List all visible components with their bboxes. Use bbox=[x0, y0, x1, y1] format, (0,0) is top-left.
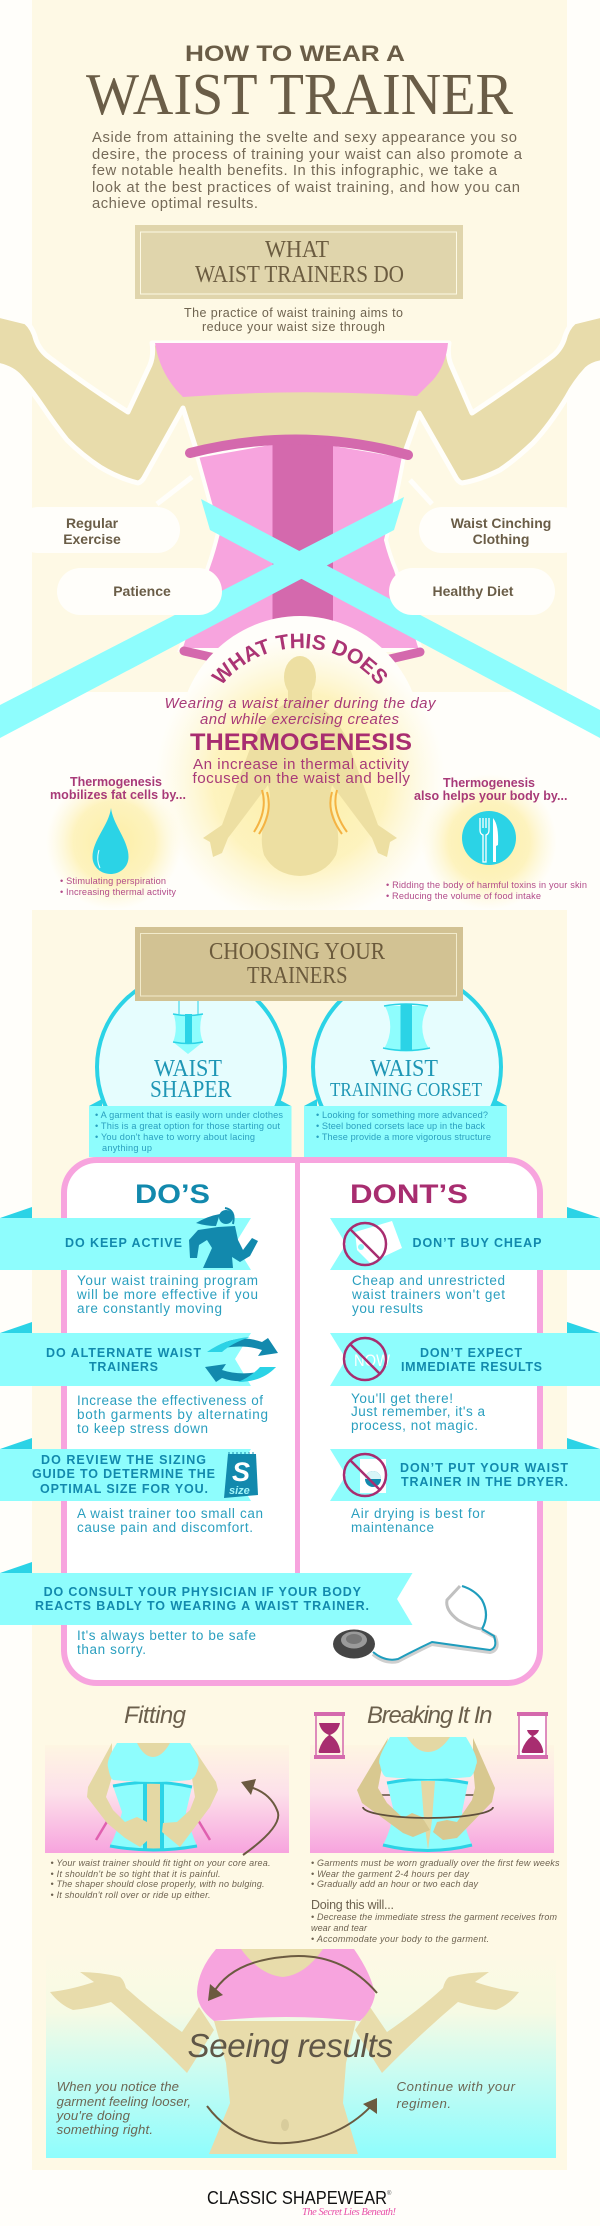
panel: breaking it in: wear and tear bbox=[311, 1923, 368, 1933]
ribbon: do review sizing guide: OPTIMAL SIZE FOR YOU. bbox=[40, 1482, 208, 1496]
text: consult bbox=[77, 1628, 256, 1657]
icon: shaper garment bbox=[173, 1001, 203, 1054]
panel: mobilizes fat cells: mobilizes fat cells by... bbox=[50, 788, 186, 802]
icon: crossed dryer bbox=[344, 1454, 386, 1496]
ribbon: do alternate waist trainers bbox=[0, 1322, 278, 1386]
card: waist shaper: WAIST bbox=[154, 1056, 222, 1082]
panel: breaking it in: • Gradually add an hour or two each day bbox=[311, 1879, 478, 1889]
panel: mobilizes fat cells bbox=[46, 774, 186, 910]
pill: waist cinching clothing bbox=[419, 507, 585, 553]
panel: seeing results: regimen. bbox=[396, 2096, 451, 2111]
arrow: upward curve bbox=[241, 1779, 278, 1855]
intro paragraph bbox=[92, 130, 523, 212]
text: dryer bbox=[351, 1506, 486, 1535]
heading banner: choosing your trainers: TRAINERS bbox=[247, 963, 348, 989]
card: waist training corset: WAIST bbox=[370, 1056, 438, 1082]
corset lower band bbox=[184, 651, 420, 659]
icon: size tag: S bbox=[232, 1457, 250, 1487]
corset description box: • Looking for something more advanced? bbox=[316, 1110, 488, 1120]
icon: fork and knife bbox=[462, 811, 516, 865]
intro to four factors: The practice of waist training aims to bbox=[184, 306, 403, 320]
text: alternate bbox=[77, 1393, 268, 1436]
shaper description box: anything up bbox=[102, 1143, 152, 1153]
panel: fitting bbox=[45, 1702, 289, 1900]
heading: what this does: WHAT THIS DOES bbox=[210, 634, 388, 684]
text: expect results bbox=[351, 1391, 485, 1433]
illustration: breaking in a corset bbox=[357, 1737, 495, 1850]
arrow: bottom curve bbox=[207, 2098, 377, 2143]
corset top band bbox=[190, 439, 408, 455]
panel: breaking it in: • Decrease the immediate stress the garment receives from bbox=[311, 1912, 558, 1922]
ribbon: do keep active: DO KEEP ACTIVE bbox=[65, 1236, 182, 1250]
icon: crossed price tag bbox=[344, 1221, 402, 1265]
title: WAIST TRAINER bbox=[86, 61, 514, 127]
ribbon: don't put in dryer: DON’T PUT YOUR WAIST bbox=[400, 1461, 568, 1475]
heading banner: choosing your trainers bbox=[135, 927, 463, 1001]
text: expect results: process, not magic. bbox=[351, 1418, 478, 1433]
white arc behind heading bbox=[178, 616, 422, 864]
icon: hourglass left bbox=[314, 1712, 345, 1759]
thermogenesis explanation: THERMOGENESIS bbox=[190, 729, 412, 756]
heading banner: choosing your trainers: CHOOSING YOUR bbox=[209, 939, 385, 965]
corset description box: • These provide a more vigorous structure bbox=[316, 1132, 491, 1142]
heading: don'ts: DONT’S bbox=[350, 1179, 468, 1209]
ribbon: do review sizing guide: GUIDE TO DETERMINE THE bbox=[32, 1467, 215, 1481]
icon: crossed now bbox=[344, 1338, 390, 1380]
thermogenesis explanation bbox=[164, 695, 437, 787]
icon: runner bbox=[189, 1208, 258, 1268]
icon: stethoscope bbox=[333, 1586, 497, 1662]
panel: fitting: • Your waist trainer should fit tight on your core area. bbox=[50, 1858, 270, 1868]
icon: crossed now: NOW bbox=[354, 1351, 390, 1370]
footer logo: ® bbox=[387, 2190, 392, 2197]
intro paragraph: achieve optimal results. bbox=[92, 196, 258, 212]
text: sizing: cause pain and discomfort. bbox=[77, 1520, 253, 1535]
text: buy cheap: you results bbox=[352, 1301, 423, 1316]
icon: corset bbox=[383, 1004, 430, 1052]
ribbon: do consult your physician: REACTS BADLY TO WEARING A WAIST TRAINER. bbox=[35, 1599, 369, 1613]
corset bbox=[180, 438, 421, 650]
measuring tape cross bbox=[0, 497, 600, 738]
panel: seeing results: garment feeling looser, bbox=[57, 2094, 191, 2109]
icon: water drop bbox=[92, 808, 128, 874]
ribbon: do keep active bbox=[0, 1207, 258, 1270]
ribbon: don't put in dryer: TRAINER IN THE DRYER. bbox=[401, 1475, 568, 1489]
shaper description box: • You don't have to worry about lacing bbox=[95, 1132, 255, 1142]
footer logo: The Secret Lies Beneath! bbox=[302, 2207, 396, 2218]
torso illustration bbox=[0, 313, 600, 659]
ribbon: don't expect immediate results: IMMEDIATE RESULTS bbox=[401, 1360, 542, 1374]
corset description box bbox=[304, 1099, 507, 1157]
pill: waist cinching clothing: Waist Cinching bbox=[451, 515, 551, 531]
text: keep active bbox=[76, 1273, 258, 1316]
panel: seeing results: something right. bbox=[57, 2122, 153, 2137]
figure silhouette with heat lines bbox=[203, 656, 397, 876]
footer logo bbox=[207, 2188, 396, 2218]
text: alternate: both garments by alternating bbox=[77, 1407, 268, 1422]
panel: breaking it in: Doing this will... bbox=[311, 1898, 394, 1912]
ribbon: do consult your physician bbox=[0, 1562, 412, 1625]
panel: seeing results: Seeing results bbox=[188, 2027, 393, 2064]
text: expect results: Just remember, it's a bbox=[351, 1404, 485, 1419]
footer logo: CLASSIC SHAPEWEAR bbox=[207, 2188, 387, 2208]
body and arms bbox=[0, 313, 600, 483]
intro paragraph: look at the best practices of waist training, and how you can bbox=[92, 180, 520, 196]
heading banner: what waist trainers do bbox=[135, 225, 463, 299]
pill: regular exercise: Exercise bbox=[63, 531, 121, 547]
card: waist shaper: SHAPER bbox=[150, 1077, 232, 1103]
card: waist shaper bbox=[89, 973, 292, 1161]
panel: fitting: • It shouldn't roll over or ride up either. bbox=[50, 1890, 210, 1900]
panel: helps your body: • Ridding the body of harmful toxins in your skin bbox=[386, 880, 587, 890]
arrow: top curve bbox=[208, 1956, 377, 2001]
panel: helps your body bbox=[386, 774, 587, 910]
icon: hourglass right bbox=[517, 1712, 548, 1759]
panel: seeing results bbox=[46, 1949, 556, 2158]
ribbon: do review sizing guide bbox=[0, 1438, 258, 1501]
text: buy cheap: Cheap and unrestricted bbox=[352, 1273, 505, 1288]
panel: mobilizes fat cells: • Stimulating perspiration bbox=[60, 876, 166, 886]
shaper description box bbox=[89, 1099, 292, 1157]
thermogenesis explanation: Wearing a waist trainer during the day bbox=[164, 695, 437, 712]
ribbon: don't buy cheap bbox=[330, 1207, 600, 1270]
panel: fitting: Fitting bbox=[124, 1702, 187, 1729]
pill: patience: Patience bbox=[113, 583, 171, 599]
intro paragraph: Aside from attaining the svelte and sexy appearance you so bbox=[92, 130, 517, 146]
text: expect results: You'll get there! bbox=[351, 1391, 453, 1406]
thermogenesis explanation: An increase in thermal activity bbox=[193, 756, 409, 773]
panel: seeing results: When you notice the bbox=[57, 2079, 179, 2094]
pill: healthy diet: Healthy Diet bbox=[433, 583, 514, 599]
panel: mobilizes fat cells: • Increasing thermal activity bbox=[60, 887, 176, 897]
intro paragraph: few notable health benefits. In this infographic, we take a bbox=[92, 163, 498, 179]
panel: seeing results: Continue with your bbox=[396, 2079, 516, 2094]
panel: breaking it in: • Accommodate your body to the garment. bbox=[311, 1934, 489, 1944]
intro to four factors bbox=[184, 306, 403, 334]
illustration: open arms body bbox=[50, 1949, 519, 2154]
text: alternate: to keep stress down bbox=[77, 1421, 208, 1436]
panel: mobilizes fat cells: Thermogenesis bbox=[70, 775, 162, 789]
card: waist training corset: TRAINING CORSET bbox=[330, 1080, 482, 1101]
shaper description box: • This is a great option for those starting out bbox=[95, 1121, 280, 1131]
panel: breaking it in: • Wear the garment 2-4 hours per day bbox=[311, 1869, 470, 1879]
pill: regular exercise: Regular bbox=[66, 515, 119, 531]
text: buy cheap bbox=[351, 1273, 505, 1316]
text: buy cheap: waist trainers won't get bbox=[351, 1287, 505, 1302]
shaper description box: • A garment that is easily worn under clothes bbox=[95, 1110, 283, 1120]
heading: do's: DO’S bbox=[135, 1179, 210, 1209]
icon: alternating arrows bbox=[205, 1337, 278, 1382]
text: consult: than sorry. bbox=[77, 1642, 146, 1657]
corset centre panel bbox=[272, 437, 333, 622]
card: waist training corset bbox=[304, 973, 507, 1161]
illustration: fitting a corset bbox=[87, 1743, 218, 1851]
panel: do's and don'ts frame bbox=[64, 1157, 540, 1683]
panel: choosing your trainers bbox=[32, 910, 567, 2170]
icon: size tag: size bbox=[229, 1485, 250, 1497]
corset description box: • Steel boned corsets lace up in the back bbox=[316, 1121, 485, 1131]
text: consult: It's always better to be safe bbox=[77, 1628, 256, 1643]
ribbon: do alternate waist trainers: TRAINERS bbox=[89, 1360, 158, 1374]
heading banner: what waist trainers do: WHAT bbox=[265, 237, 329, 263]
text: sizing: A waist trainer too small can bbox=[77, 1506, 263, 1521]
text: dryer: Air drying is best for bbox=[351, 1506, 486, 1521]
panel: fitting: • It shouldn't be so tight that it is painful. bbox=[50, 1869, 220, 1879]
ribbon: do review sizing guide: DO REVIEW THE SIZING bbox=[41, 1453, 206, 1467]
text: keep active: Your waist training program bbox=[77, 1273, 258, 1288]
title: HOW TO WEAR A bbox=[185, 41, 405, 66]
glow behind figure bbox=[155, 635, 445, 925]
ribbon: don't expect immediate results: DON’T EXPECT bbox=[420, 1346, 522, 1360]
text: keep active: are constantly moving bbox=[77, 1301, 222, 1316]
panel: helps your body: • Reducing the volume of food intake bbox=[386, 891, 541, 901]
ribbon: don't expect immediate results bbox=[330, 1322, 600, 1386]
thermogenesis explanation: and while exercising creates bbox=[200, 711, 400, 728]
intro to four factors: reduce your waist size through bbox=[202, 320, 385, 334]
pill: patience bbox=[57, 568, 222, 615]
pill: waist cinching clothing: Clothing bbox=[473, 531, 529, 547]
text: alternate: Increase the effectiveness of bbox=[77, 1393, 263, 1408]
panel: breaking it in: • Garments must be worn gradually over the first few weeks bbox=[311, 1858, 560, 1868]
panel: fitting: • The shaper should close properly, with no bulging. bbox=[50, 1879, 264, 1889]
pill: regular exercise bbox=[15, 507, 180, 553]
ribbon: don't put in dryer bbox=[330, 1438, 600, 1501]
pill: healthy diet bbox=[389, 568, 555, 615]
panel: breaking it in bbox=[310, 1702, 560, 1944]
pink bra bbox=[155, 343, 448, 397]
text: keep active: will be more effective if you bbox=[76, 1287, 258, 1302]
text: dryer: maintenance bbox=[351, 1520, 434, 1535]
ribbon: do alternate waist trainers: DO ALTERNATE WAIST bbox=[46, 1346, 201, 1360]
thermogenesis explanation: focused on the waist and belly bbox=[192, 770, 410, 787]
panel: helps your body: Thermogenesis bbox=[443, 776, 535, 790]
intro paragraph: desire, the process of training your waist can also promote a bbox=[92, 147, 523, 163]
text: sizing bbox=[77, 1506, 263, 1535]
panel: seeing results: you're doing bbox=[56, 2108, 131, 2123]
ribbon: don't buy cheap: DON’T BUY CHEAP bbox=[412, 1236, 542, 1250]
ribbon: do consult your physician: DO CONSULT YOUR PHYSICIAN IF YOUR BODY bbox=[44, 1585, 362, 1599]
panel: what waist trainers do bbox=[32, 0, 567, 692]
panel: breaking it in: Breaking It In bbox=[367, 1702, 492, 1729]
icon: size tag bbox=[224, 1453, 258, 1498]
heading banner: what waist trainers do: WAIST TRAINERS DO bbox=[195, 262, 404, 288]
panel: helps your body: also helps your body by... bbox=[414, 789, 568, 803]
